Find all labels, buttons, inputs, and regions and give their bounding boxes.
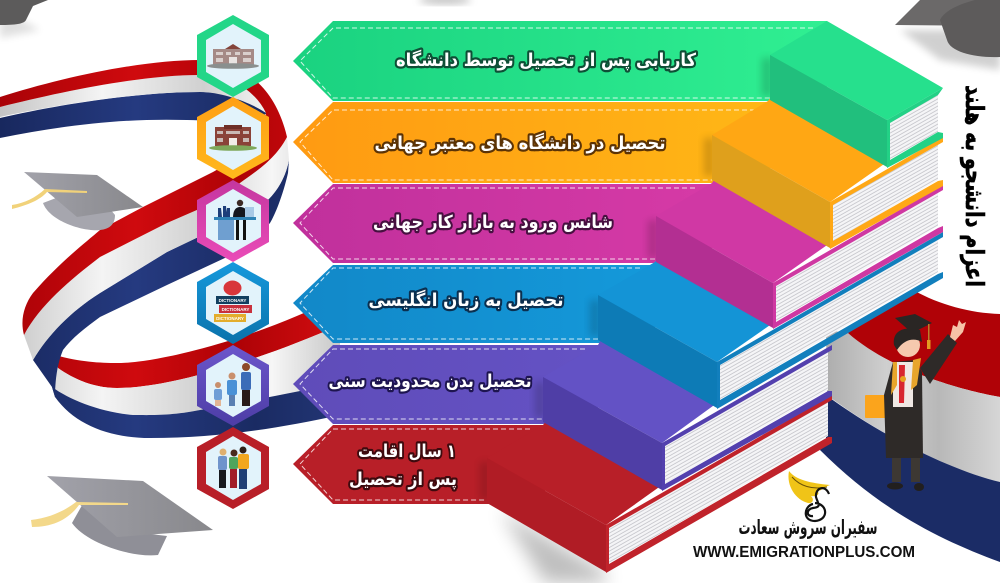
logo: swan wing (788, 471, 830, 521)
book: blue (598, 232, 943, 409)
banner text: employment: کاریابی پس از تحصیل توسط دانشگاه (396, 49, 696, 71)
hexagon 6: students (197, 427, 269, 509)
logo: brand name: سفیران سروش سعادت (738, 515, 878, 539)
book: green (770, 21, 943, 168)
book: magenta (656, 177, 943, 329)
banner: magenta (293, 184, 712, 263)
banner text: no age limit: تحصیل بدن محدودیت سنی (328, 371, 532, 392)
cap: top centre (419, 0, 471, 4)
website: WWW.EMIGRATIONPLUS.COM (693, 544, 915, 561)
banner: orange (293, 102, 770, 183)
book: purple (543, 338, 832, 491)
banner text: universities: تحصیل در دانشگاه های معتبر جهانی (374, 132, 666, 154)
book: red (487, 395, 832, 573)
icon: three people (214, 363, 251, 406)
icon: apple and books: DICTIONARY (222, 307, 249, 312)
hexagon 5: family (197, 345, 269, 426)
icon: campus building (209, 125, 257, 151)
flag: bottom right (820, 290, 1000, 562)
icon: person at desk (214, 200, 256, 240)
banner: red (293, 425, 545, 504)
book: orange (712, 96, 943, 249)
icon: apple and books: DICTIONARY (216, 316, 244, 321)
icon: apple and books: DICTIONARY (219, 298, 246, 303)
icon: apple and books (214, 280, 252, 322)
ribbon: Dutch flag left (0, 60, 340, 438)
banner text: english: تحصیل به زبان انگلیسی (368, 289, 564, 311)
graduate character (865, 314, 966, 491)
banner: purple (293, 345, 598, 424)
book shadows (480, 58, 772, 583)
banner text: job market: شانس ورود به بازار کار جهانی (373, 212, 613, 233)
banner text: residence: ۱ سال اقامت (358, 441, 456, 462)
cap: bottom left (31, 476, 213, 555)
cap: left middle (12, 172, 143, 230)
hexagon 1: university (197, 15, 269, 97)
icon: three students (218, 446, 249, 489)
icon: university building (207, 44, 259, 69)
cap: top left (0, 0, 48, 38)
title: اعزام دانشجو به هلند (959, 85, 989, 287)
cap: top right (895, 0, 1000, 70)
banner: blue (293, 265, 655, 343)
banner: green (293, 21, 827, 101)
hexagon 2: campus (197, 97, 269, 179)
hexagon 3: office worker (197, 180, 269, 262)
banner text: after study: پس از تحصیل (349, 469, 457, 490)
hexagon 4: dictionaries (197, 262, 269, 344)
